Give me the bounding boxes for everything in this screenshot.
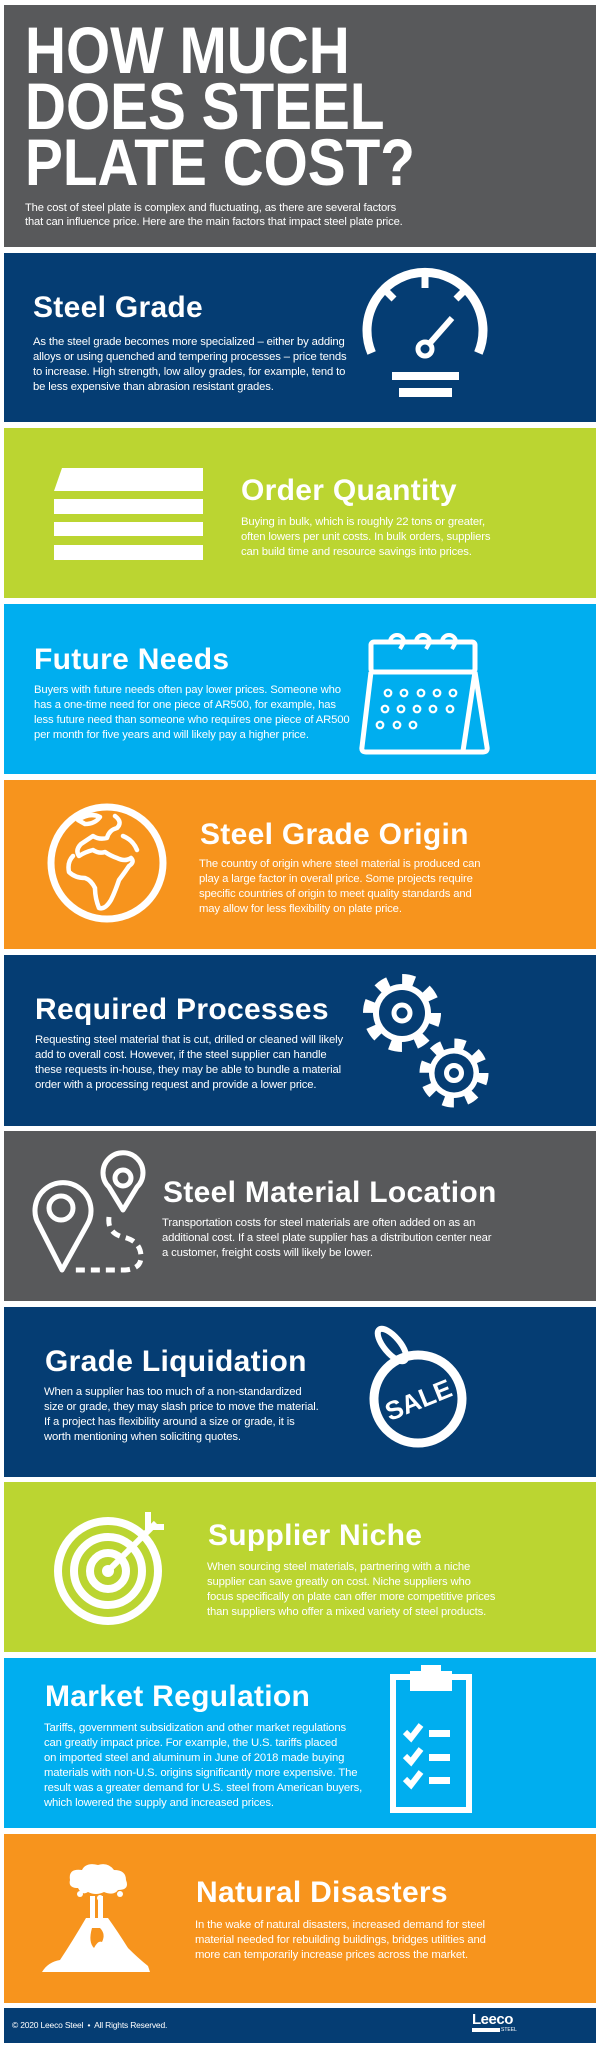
text block: on imported steel and aluminum in June of 2018 made buying: [44, 1752, 344, 1764]
text block: [44, 1722, 362, 1809]
icon: clipboard: [390, 1665, 472, 1813]
text block: order with a processing request and provide a lower price.: [35, 1079, 316, 1091]
text block: may allow for less flexibility on plate price.: [199, 903, 402, 915]
text block: additional cost. If a steel plate supplier has a distribution center near: [162, 1232, 491, 1244]
text block: [162, 1217, 492, 1259]
text block: materials with non-U.S. origins significantly more expensive. The: [44, 1767, 357, 1779]
intro text: [25, 202, 403, 228]
text block: In the wake of natural disasters, increased demand for steel: [195, 1919, 485, 1931]
icon: globe: [48, 804, 166, 922]
text block: When sourcing steel materials, partnering with a niche: [207, 1561, 470, 1573]
text block: which lowered the supply and increased prices.: [44, 1797, 274, 1809]
text block: a customer, freight costs will likely be lower.: [162, 1247, 373, 1259]
panel: supplier niche: [4, 1482, 596, 1652]
panel: order quantity: [4, 428, 596, 598]
intro text: The cost of steel plate is complex and fluctuating, as there are several factors: [25, 202, 396, 214]
text block: Buyers with future needs often pay lower prices. Someone who: [34, 684, 341, 696]
text block: [44, 1386, 319, 1443]
text block: [207, 1561, 495, 1618]
text block: to increase. High strength, low alloy grades, for example, tend to: [33, 366, 345, 378]
copyright: © 2020 Leeco Steel • All Rights Reserved.: [12, 2020, 167, 2030]
text block: focus specifically on plate can offer more competitive prices: [207, 1591, 495, 1603]
text block: per month for five years and will likely pay a higher price.: [34, 729, 309, 741]
icon: sale tag: SALE: [381, 1373, 456, 1427]
heading: Supplier Niche: [208, 1519, 422, 1552]
title: [25, 13, 415, 199]
text block: often lowers per unit costs. In bulk orders, suppliers: [241, 531, 490, 543]
text block: Buying in bulk, which is roughly 22 tons or greater,: [241, 516, 485, 528]
text block: material needed for rebuilding buildings, bridges utilities and: [195, 1934, 486, 1946]
text block: Tariffs, government subsidization and other market regulations: [44, 1722, 346, 1734]
heading: Market Regulation: [45, 1680, 310, 1713]
icon: volcano: [42, 1864, 150, 1972]
header panel: [4, 5, 596, 247]
heading: Grade Liquidation: [45, 1345, 307, 1378]
text block: these requests in-house, they may be able to bundle a material: [35, 1064, 341, 1076]
text block: The country of origin where steel material is produced can: [199, 858, 480, 870]
text block: has a one-time need for one piece of AR500, for example, has: [34, 699, 336, 711]
heading: Steel Grade Origin: [200, 818, 469, 851]
icon: target: [54, 1512, 164, 1625]
heading: Natural Disasters: [196, 1876, 448, 1909]
text block: than suppliers who offer a mixed variety of steel products.: [207, 1606, 486, 1618]
heading: Order Quantity: [241, 474, 457, 507]
text block: [34, 684, 350, 741]
title: PLATE COST?: [25, 125, 415, 199]
text block: add to overall cost. However, if the steel supplier can handle: [35, 1049, 326, 1061]
icon: stacked plates: [54, 468, 203, 560]
text block: [241, 516, 490, 558]
text block: alloys or using quenched and tempering processes – price tends: [33, 351, 346, 363]
text block: be less expensive than abrasion resistant grades.: [33, 381, 274, 393]
text block: When a supplier has too much of a non-standardized: [44, 1386, 302, 1398]
text block: [199, 858, 480, 915]
text block: worth mentioning when soliciting quotes.: [44, 1431, 241, 1443]
panel: grade liquidation: [4, 1307, 596, 1477]
icon: calendar: [359, 633, 490, 754]
logo: STEEL: [501, 2027, 517, 2033]
text block: supplier can save greatly on cost. Niche suppliers who: [207, 1576, 471, 1588]
text block: [35, 1034, 344, 1091]
logo: Leeco: [472, 2011, 513, 2028]
text block: result was a greater demand for U.S. steel from American buyers,: [44, 1782, 362, 1794]
icon: map pins: [32, 1150, 146, 1272]
text block: size or grade, they may slash price to move the material.: [44, 1401, 319, 1413]
title: DOES STEEL: [25, 69, 385, 143]
text block: Requesting steel material that is cut, drilled or cleaned will likely: [35, 1034, 343, 1046]
panel: steel grade: [4, 253, 596, 422]
icon: sale tag: [370, 1326, 466, 1448]
panel: steel grade origin: [4, 780, 596, 949]
footer: [4, 2008, 596, 2043]
text block: Transportation costs for steel materials are often added on as an: [162, 1217, 475, 1229]
text block: less future need than someone who requires one piece of AR500: [34, 714, 350, 726]
text block: As the steel grade becomes more specialized – either by adding: [33, 336, 345, 348]
intro text: that can influence price. Here are the main factors that impact steel plate price.: [25, 216, 403, 228]
heading: Steel Material Location: [163, 1176, 497, 1209]
heading: Future Needs: [34, 643, 229, 676]
text block: If a project has flexibility around a size or grade, it is: [44, 1416, 295, 1428]
panel: steel material location: [4, 1131, 596, 1301]
panel: natural disasters: [4, 1834, 596, 2003]
icon: gauge: [362, 268, 488, 397]
text block: more can temporarily increase prices across the market.: [195, 1949, 468, 1961]
text block: play a large factor in overall price. Some projects require: [199, 873, 473, 885]
title: HOW MUCH: [25, 13, 350, 87]
text block: specific countries of origin to meet quality standards and: [199, 888, 472, 900]
heading: Required Processes: [35, 993, 329, 1026]
heading: Steel Grade: [33, 291, 203, 324]
panel: future needs: [4, 604, 596, 774]
panel: required processes: [4, 955, 596, 1126]
text block: [33, 336, 346, 393]
text block: can greatly impact price. For example, the U.S. tariffs placed: [44, 1737, 337, 1749]
text block: can build time and resource savings into prices.: [241, 546, 472, 558]
icon: gears: [363, 974, 488, 1108]
text block: [195, 1919, 486, 1961]
panel: market regulation: [4, 1658, 596, 1828]
